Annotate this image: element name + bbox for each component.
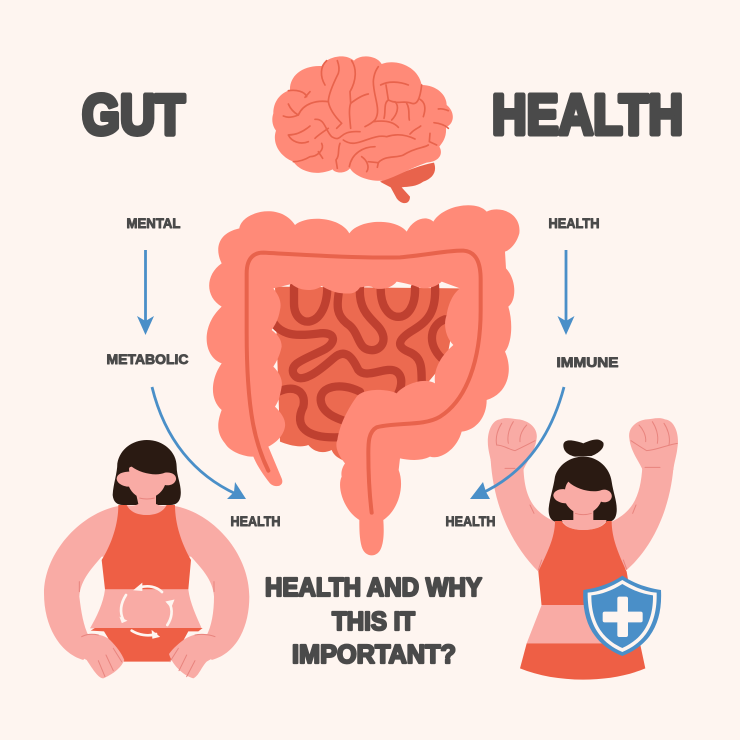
label: METABOLIC: METABOLIC <box>106 351 188 367</box>
fists <box>488 418 537 470</box>
hands <box>67 634 124 678</box>
tank top <box>102 505 191 589</box>
arrow: health to immune <box>558 250 574 335</box>
icon: shield with cross <box>583 576 661 656</box>
title: GUT: GUT <box>82 83 185 147</box>
illustration: strong woman with shield <box>488 418 678 680</box>
title: HEALTH: HEALTH <box>492 83 683 147</box>
label: IMMUNE: IMMUNE <box>556 354 618 370</box>
label: MENTAL: MENTAL <box>126 215 181 231</box>
hair bun <box>563 440 604 457</box>
icon: intestines <box>207 205 520 555</box>
neck and face <box>562 510 607 530</box>
arms <box>491 460 570 572</box>
large intestine <box>207 205 520 555</box>
question text: HEALTH AND WHY <box>265 572 482 602</box>
dress <box>538 521 633 607</box>
hair <box>113 440 181 505</box>
arrow: immune to health <box>470 387 564 499</box>
question text: THIS IT <box>332 606 415 636</box>
arms <box>44 506 130 660</box>
hair <box>549 457 617 522</box>
icon: brain <box>272 56 453 203</box>
shorts <box>91 628 203 662</box>
question text <box>265 572 482 669</box>
midriff <box>90 589 202 628</box>
mesentery cavity <box>275 287 460 463</box>
arrow: metabolic to health <box>152 387 246 499</box>
label: HEALTH lower left: HEALTH <box>230 513 280 529</box>
neck and face <box>127 493 167 515</box>
arrow: mental to metabolic <box>137 250 154 335</box>
small intestine loops <box>274 285 445 437</box>
question text: IMPORTANT? <box>292 639 456 669</box>
icon: circular arrows <box>120 583 174 638</box>
label: HEALTH top right: HEALTH <box>548 215 600 231</box>
illustration: woman holding stomach <box>44 440 249 678</box>
label: HEALTH lower right: HEALTH <box>446 513 496 529</box>
